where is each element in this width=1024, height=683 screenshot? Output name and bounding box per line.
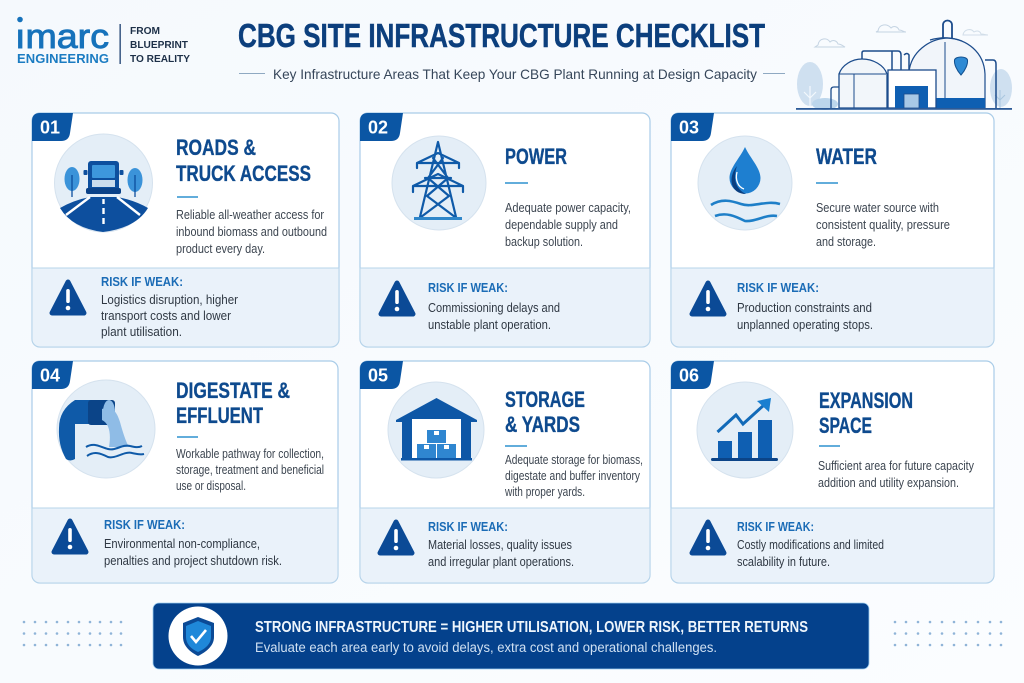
subtitle: Key Infrastructure Areas That Keep Your CBG Plant Running at Design Capacity: [273, 66, 757, 82]
icon: warning: [692, 522, 724, 553]
panel: 06 expansion space: [671, 361, 994, 583]
banner headline: STRONG INFRASTRUCTURE = HIGHER UTILISATION, LOWER RISK, BETTER RETURNS: [255, 619, 808, 636]
logo: imarc engineering: FROM: [130, 25, 160, 37]
card 03 description: [816, 201, 950, 249]
card 06 heading: SPACE: [819, 413, 872, 438]
icon: warning: [52, 282, 84, 313]
card 06 risk band: [671, 508, 994, 583]
panel: 01 roads and truck access: [32, 113, 339, 347]
icon: growth chart: [697, 382, 793, 478]
card 05 heading: & YARDS: [505, 412, 580, 437]
card 04 risk text: RISK IF WEAK:: [104, 518, 185, 532]
logo: imarc engineering: ımarc: [15, 18, 109, 56]
card 01 risk text: [101, 275, 238, 339]
card 03 risk text: unplanned operating stops.: [737, 318, 873, 332]
card 05 risk text: Material losses, quality issues: [428, 538, 572, 552]
banner: key takeaway: [153, 603, 869, 669]
card 01 description: inbound biomass and outbound: [176, 225, 327, 239]
decoration: right dots: [894, 621, 1002, 646]
card 01 heading: TRUCK ACCESS: [176, 161, 311, 186]
card 04 heading: EFFLUENT: [176, 403, 263, 428]
card 04 background: [32, 361, 338, 583]
icon: warning: [381, 283, 413, 314]
card 03 heading: WATER: [816, 144, 877, 169]
card 05 description: with proper yards.: [504, 485, 585, 499]
card 05 risk text: RISK IF WEAK:: [428, 520, 508, 534]
card 04 description: storage, treatment and beneficial: [176, 463, 324, 477]
card 06 heading: [819, 388, 913, 438]
card 05 description: digestate and buffer inventory: [505, 469, 641, 483]
card 04 risk text: penalties and project shutdown risk.: [104, 554, 282, 568]
card 02 description: Adequate power capacity,: [505, 201, 631, 215]
title: CBG SITE INFRASTRUCTURE CHECKLIST: [238, 17, 765, 54]
card 01 risk band: [32, 268, 339, 347]
panel: 02 power: [360, 113, 650, 347]
card 03 background: [671, 113, 994, 347]
icon: warning: [692, 283, 724, 314]
panel: 03 water: [671, 113, 994, 347]
card 04 number: 04: [40, 366, 60, 386]
card 03 description: consistent quality, pressure: [816, 218, 950, 232]
card 06 risk text: Costly modifications and limited: [737, 538, 884, 552]
card 02 number: [360, 113, 403, 141]
card 02 risk band: [360, 268, 650, 347]
card 01 background: [32, 113, 339, 347]
card 03 number: [671, 113, 714, 141]
card 01 heading: ROADS &: [176, 135, 256, 160]
card 04 description: [176, 447, 324, 493]
card 05 heading: [505, 387, 585, 437]
card 02 risk text: [428, 281, 560, 332]
card 04 heading: [176, 378, 290, 428]
card 01 number: [32, 113, 73, 141]
card 02 description: [505, 201, 631, 249]
icon: warehouse: [388, 382, 484, 478]
card 04 risk text: [104, 518, 282, 568]
logo: imarc engineering: ENGINEERING: [17, 51, 109, 66]
card 04 risk band: [32, 508, 338, 583]
card 03 description: and storage.: [816, 235, 876, 249]
icon: warning: [54, 521, 86, 552]
card 05 number: 05: [368, 366, 388, 386]
card 01 heading: [176, 135, 311, 186]
card 02 description: dependable supply and: [505, 218, 618, 232]
card 03 risk text: [737, 281, 873, 332]
card 04 description: Workable pathway for collection,: [176, 447, 324, 461]
card 02 number: 02: [368, 118, 388, 138]
card 06 description: Sufficient area for future capacity: [818, 459, 975, 473]
card 04 risk text: Environmental non-compliance,: [104, 537, 260, 551]
card 02 risk text: RISK IF WEAK:: [428, 281, 508, 295]
icon: discharge pipe: [57, 380, 155, 478]
banner subtext: Evaluate each area early to avoid delays, extra cost and operational challenges.: [255, 640, 717, 655]
card 05 number: [360, 361, 403, 389]
card 03 number: 03: [679, 118, 699, 138]
icon: truck on road: [54, 134, 152, 232]
card 06 heading: EXPANSION: [819, 388, 913, 413]
card 02 description: backup solution.: [505, 235, 583, 249]
card 05 risk band: [360, 508, 650, 583]
card 03 risk text: Production constraints and: [737, 301, 872, 315]
card 06 number: 06: [679, 366, 699, 386]
card 03 risk text: RISK IF WEAK:: [737, 281, 819, 295]
card 06 risk text: [737, 520, 884, 569]
icon: warning: [380, 522, 412, 553]
card 06 risk text: RISK IF WEAK:: [737, 520, 814, 534]
card 06 description: [818, 459, 975, 490]
card 05 risk text: and irregular plant operations.: [428, 555, 574, 569]
card 01 description: [176, 208, 327, 256]
card 02 background: [360, 113, 650, 347]
card 04 heading: DIGESTATE &: [176, 378, 290, 403]
card 05 background: [360, 361, 650, 583]
card 05 description: Adequate storage for biomass,: [505, 453, 643, 467]
card 02 heading: POWER: [505, 144, 567, 169]
card 03 risk band: [671, 268, 994, 347]
card 02 risk text: Commissioning delays and: [428, 301, 560, 315]
card 04 number: [32, 361, 73, 389]
card 01 description: Reliable all-weather access for: [176, 208, 324, 222]
card 06 description: addition and utility expansion.: [818, 476, 959, 490]
logo: imarc engineering: [15, 17, 190, 66]
card 06 background: [671, 361, 994, 583]
card 06 number: [671, 361, 714, 389]
logo: imarc engineering: BLUEPRINT: [130, 39, 189, 51]
panel: 05 storage and yards: [360, 361, 650, 583]
card 01 risk text: Logistics disruption, higher: [101, 293, 238, 307]
card 06 risk text: scalability in future.: [737, 555, 830, 569]
card 01 description: product every day.: [176, 242, 265, 256]
card 03 description: Secure water source with: [816, 201, 939, 215]
banner background: [153, 603, 869, 669]
card 01 risk text: RISK IF WEAK:: [101, 275, 183, 289]
illustration: CBG plant: [796, 20, 1012, 110]
card 01 risk text: transport costs and lower: [101, 309, 231, 323]
logo: imarc engineering: TO REALITY: [130, 53, 190, 65]
card 05 risk text: [428, 520, 574, 569]
card 02 risk text: unstable plant operation.: [428, 318, 551, 332]
decoration: left dots: [23, 621, 122, 646]
card 01 number: 01: [40, 118, 60, 138]
icon: transmission tower: [392, 136, 486, 230]
card 05 heading: STORAGE: [505, 387, 585, 412]
card 01 risk text: plant utilisation.: [101, 325, 182, 339]
card 05 description: [504, 453, 643, 499]
card 04 description: use or disposal.: [176, 479, 246, 493]
icon: water drop and waves: [698, 136, 792, 230]
panel: 04 digestate and effluent: [32, 361, 338, 583]
icon: shield: [168, 606, 228, 666]
